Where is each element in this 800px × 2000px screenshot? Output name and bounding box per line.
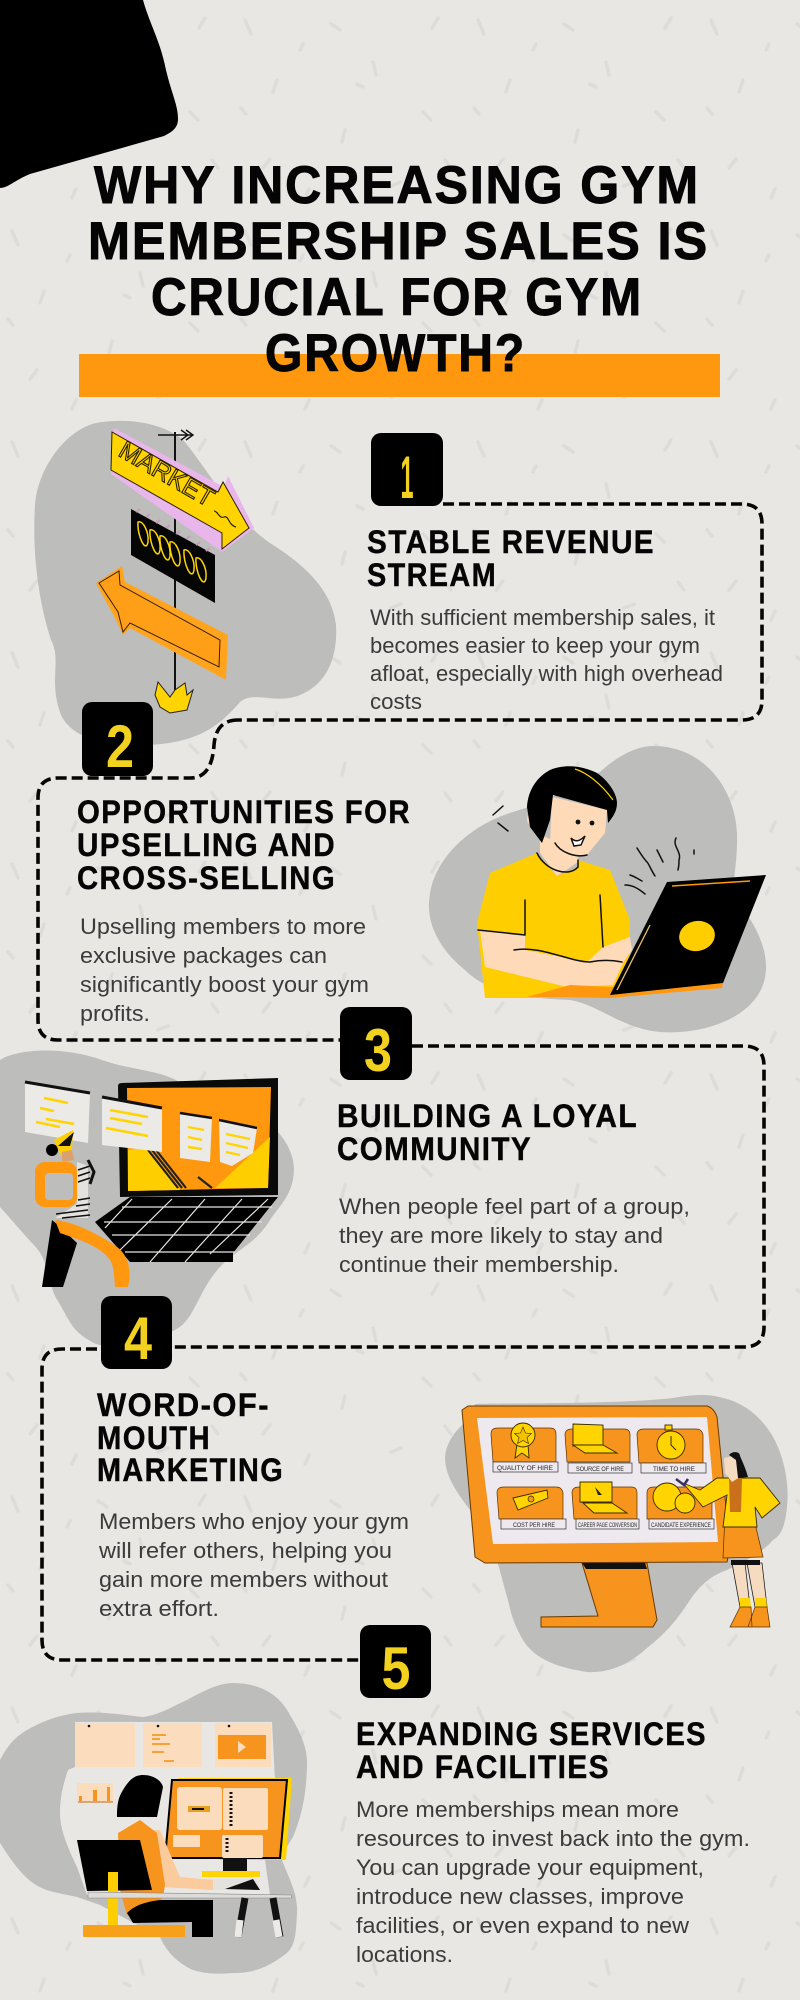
body 2: profits. [80, 1001, 150, 1026]
illustration: market signpost [96, 428, 254, 713]
body 4: extra effort. [99, 1596, 219, 1621]
body 3: When people feel part of a group, [339, 1194, 690, 1219]
title text: GROWTH? [265, 324, 526, 383]
black corner blob [0, 0, 178, 188]
heading 2 [77, 794, 411, 896]
grey blob 4 [445, 1395, 788, 1672]
dashed box 1 [238, 504, 762, 720]
dashboard tiles: CANDIDATE EXPERIENCE [651, 1522, 711, 1529]
badge 5: 5 [382, 1635, 410, 1702]
illustration: market signpost: MARKET [114, 436, 219, 513]
body 5: locations. [356, 1942, 453, 1967]
badge 2: 2 [106, 713, 134, 780]
body 5: More memberships mean more [356, 1797, 679, 1822]
illustration: man with laptop [477, 766, 766, 998]
body 1: becomes easier to keep your gym [370, 633, 700, 658]
panel: stable revenue stream [34, 421, 762, 745]
body 4 [98, 1509, 409, 1621]
illustration: dashboard monitor with woman [462, 1406, 780, 1627]
panel: building a loyal community [0, 1007, 764, 1347]
body 3: continue their membership. [339, 1252, 619, 1277]
dashboard tiles: CAREER PAGE CONVERSION [578, 1522, 637, 1529]
dashboard tiles: SOURCE OF HIRE [576, 1466, 625, 1473]
title underline bar [79, 354, 720, 397]
dashed box 3 [171, 1046, 764, 1347]
heading 3: BUILDING A LOYAL [337, 1098, 638, 1134]
title text: CRUCIAL FOR GYM [151, 268, 643, 327]
body 2 [80, 914, 369, 1026]
panel: opportunities for upselling [38, 702, 766, 1040]
illustration: woman at desk [60, 1722, 292, 1937]
heading 2: CROSS-SELLING [77, 860, 336, 896]
heading 5 [356, 1716, 707, 1785]
badge 4 [101, 1296, 172, 1372]
title text: MEMBERSHIP SALES IS [88, 212, 709, 271]
heading 2: OPPORTUNITIES FOR [77, 794, 411, 830]
dashed box 2 [38, 720, 340, 1040]
body 3 [339, 1194, 690, 1277]
heading 1: STREAM [367, 557, 497, 593]
heading 4: MOUTH [97, 1420, 211, 1456]
body 4: Members who enjoy your gym [99, 1509, 409, 1534]
body 5: You can upgrade your equipment, [356, 1855, 704, 1880]
dashboard tiles: QUALITY OF HIRE [497, 1465, 554, 1472]
badge 4: 4 [124, 1305, 153, 1372]
body 5: facilities, or even expand to new [356, 1913, 689, 1938]
body 3: they are more likely to stay and [339, 1223, 663, 1248]
badge 5 [360, 1625, 431, 1702]
grey blob 3 [0, 1051, 294, 1346]
title [79, 156, 720, 397]
heading 5: EXPANDING SERVICES [356, 1716, 707, 1752]
heading 5: AND FACILITIES [356, 1749, 610, 1785]
body 5: resources to invest back into the gym. [356, 1826, 750, 1851]
illustration: laptop and person [25, 1078, 278, 1287]
body 1: afloat, especially with high overhead [370, 661, 723, 686]
heading 4 [97, 1387, 284, 1488]
body 1: costs [370, 689, 422, 714]
body 4: gain more members without [99, 1567, 388, 1592]
body 5 [356, 1797, 750, 1967]
dashboard tiles: TIME TO HIRE [653, 1466, 696, 1473]
badge 3 [340, 1007, 412, 1084]
badge 1 [371, 433, 443, 511]
heading 3 [337, 1098, 638, 1167]
heading 1: STABLE REVENUE [367, 524, 655, 560]
panel: word-of-mouth marketing [42, 1296, 788, 1672]
body 2: Upselling members to more [80, 914, 366, 939]
heading 2: UPSELLING AND [77, 827, 336, 863]
grey blob 5 [0, 1683, 307, 1974]
body 2: significantly boost your gym [80, 972, 369, 997]
dashboard tiles [491, 1423, 714, 1529]
body 4: will refer others, helping you [98, 1538, 392, 1563]
panel: expanding services and facilities [0, 1625, 750, 1974]
title text [88, 156, 709, 383]
grey blob 2 [429, 746, 766, 1032]
dashboard tiles: COST PER HIRE [513, 1522, 556, 1529]
body 2: exclusive packages can [80, 943, 327, 968]
body 5: introduce new classes, improve [356, 1884, 684, 1909]
heading 4: WORD-OF- [97, 1387, 270, 1423]
badge 2 [82, 702, 153, 780]
grey blob 1 [34, 421, 336, 745]
badge 1: 1 [400, 444, 414, 511]
body 1: With sufficient membership sales, it [370, 605, 715, 630]
heading 1 [367, 524, 655, 593]
title text: WHY INCREASING GYM [94, 156, 700, 215]
heading 4: MARKETING [97, 1452, 284, 1488]
badge 3: 3 [364, 1017, 392, 1084]
woman pointing [676, 1452, 780, 1627]
heading 3: COMMUNITY [337, 1131, 532, 1167]
dashed box 4 [42, 1349, 360, 1660]
body 1 [370, 605, 723, 714]
